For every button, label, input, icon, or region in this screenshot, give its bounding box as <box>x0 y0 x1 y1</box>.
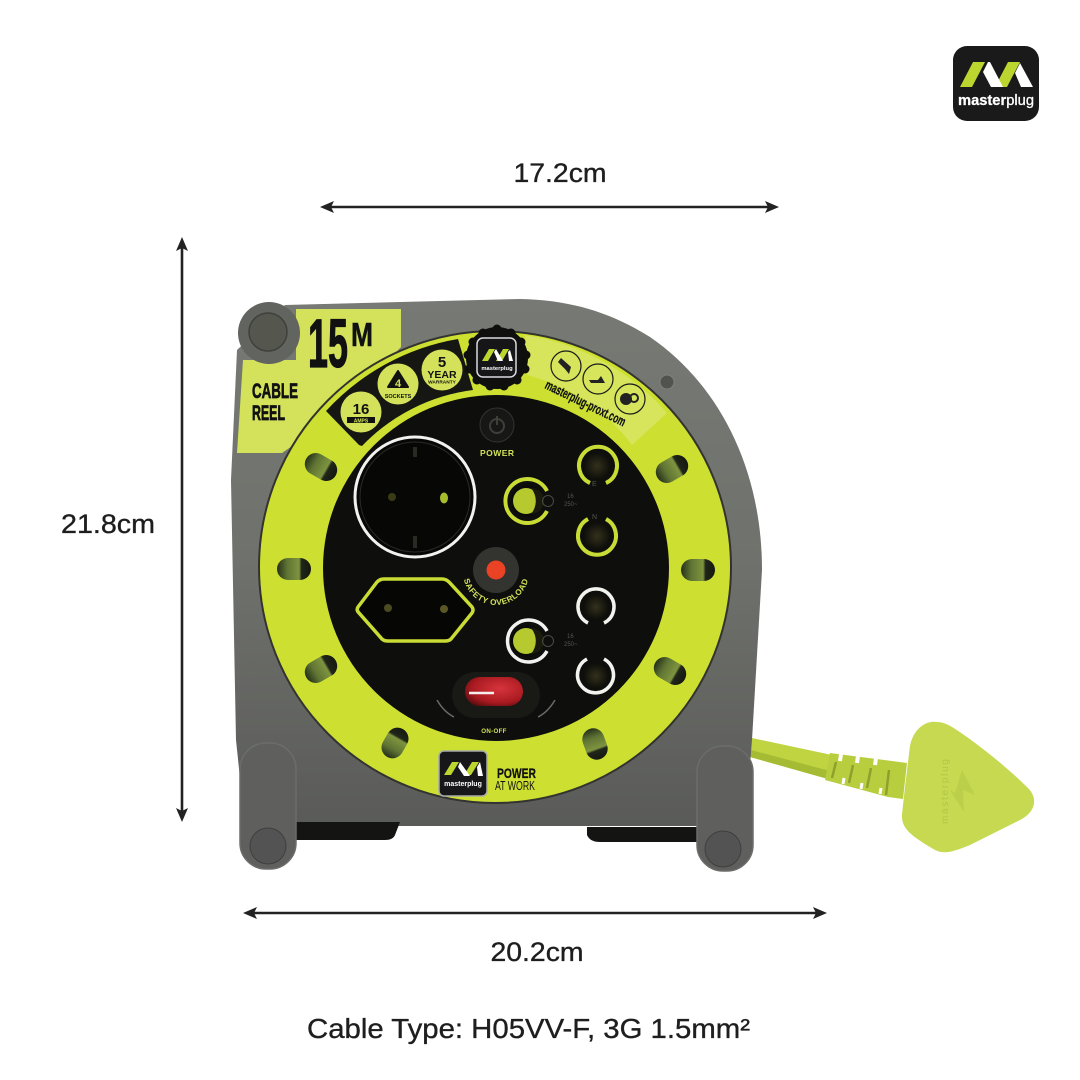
power button <box>480 408 514 458</box>
dimension: height 21.8cm: 21.8cm <box>61 509 155 539</box>
hexagonal socket <box>357 579 473 641</box>
yellow centre hole: N <box>592 514 597 521</box>
left foot <box>240 743 296 869</box>
bottom logo badge <box>439 751 487 796</box>
yellow centre hole: E <box>592 481 597 488</box>
safety overload button: SAFETY OVERLOAD <box>464 578 528 605</box>
badge band: ratings: YEAR <box>427 369 457 381</box>
ring slots <box>277 449 715 763</box>
safety overload button <box>464 547 528 605</box>
badge band: ratings: 5 <box>438 354 446 371</box>
schuko socket <box>355 437 475 557</box>
power button: POWER <box>480 448 514 458</box>
dimension: height 21.8cm <box>61 237 188 822</box>
brand logo: masterplug: masterplug <box>958 93 1034 109</box>
brand logo: masterplug <box>953 46 1039 121</box>
dimension: width 17.2cm: 17.2cm <box>514 158 606 188</box>
plug and cord <box>750 722 1034 852</box>
label: 15M cable reel: 15 <box>308 305 348 382</box>
yellow centre hole: 250~ <box>564 502 578 508</box>
centre reel knob with logo: masterplug <box>481 366 513 372</box>
yellow centre hole <box>511 452 611 550</box>
power at work tagline <box>495 765 536 793</box>
badge band: ratings: 16 <box>353 401 369 418</box>
dimension: depth 20.2cm: 20.2cm <box>490 937 584 967</box>
label: 15M cable reel: M <box>351 316 373 353</box>
on-off rocker switch <box>437 672 555 735</box>
dimension: width 17.2cm <box>320 158 779 213</box>
white centre hole: 250~ <box>564 642 578 648</box>
tools label panel <box>525 335 667 445</box>
white centre hole <box>511 594 609 689</box>
badge band: ratings: AMPS <box>354 418 369 424</box>
cable type caption: Cable Type: H05VV-F, 3G 1.5mm² <box>307 1013 750 1044</box>
white socket pin guides <box>508 589 614 693</box>
black control panel <box>323 395 669 741</box>
bottom logo badge: masterplug <box>444 781 482 788</box>
power at work tagline: AT WORK <box>495 779 535 793</box>
tools label panel: masterplug-proxt.com <box>543 377 628 429</box>
under-body shadow feet <box>296 822 698 842</box>
label: 15M cable reel <box>237 305 401 453</box>
badge band: ratings: WARRANTY <box>428 380 457 386</box>
screw hole <box>660 375 674 389</box>
yellow socket pin guides <box>505 447 617 555</box>
badge band: ratings: 4 <box>395 378 402 390</box>
badge band: ratings <box>326 339 473 446</box>
on-off rocker switch: ON-OFF <box>481 728 507 735</box>
yellow centre hole: 16 <box>567 494 574 500</box>
power at work tagline: POWER <box>497 765 536 781</box>
plug and cord: masterplug <box>940 759 951 824</box>
right foot <box>697 746 753 871</box>
badge band: ratings: SOCKETS <box>385 394 412 400</box>
top-left handle knob <box>238 302 300 364</box>
dimension: depth 20.2cm <box>243 907 827 967</box>
centre reel knob with logo <box>464 324 530 390</box>
reel body <box>231 299 762 826</box>
label: 15M cable reel: CABLE <box>252 380 298 403</box>
label: 15M cable reel: REEL <box>252 402 285 425</box>
white centre hole: 16 <box>567 634 574 640</box>
yellow ring <box>259 331 731 803</box>
